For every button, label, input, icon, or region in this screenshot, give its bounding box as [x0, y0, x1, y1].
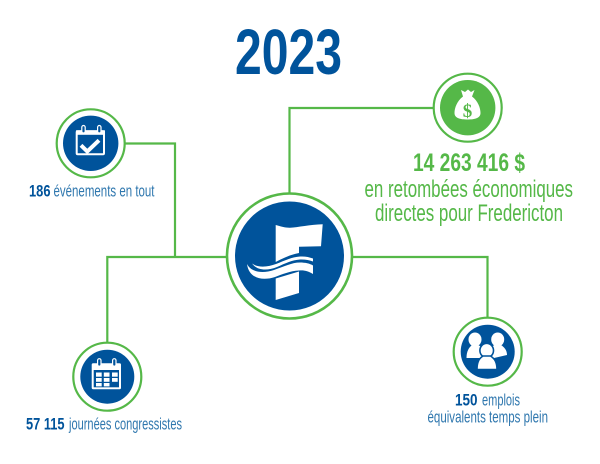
- stat: jobs: 150: [455, 391, 478, 410]
- flag logo: [247, 224, 323, 300]
- icon: monthly calendar: [73, 343, 141, 411]
- title: 2023: [235, 16, 342, 88]
- stat: events: 186: [29, 182, 50, 200]
- stat: delegate days: 57 115: [26, 414, 64, 434]
- stat: jobs: équivalents temps plein: [428, 408, 548, 427]
- stat: jobs: emplois: [482, 391, 520, 410]
- icon: calendar with check: [57, 109, 125, 177]
- stat: delegate days: journées congressistes: [68, 414, 182, 434]
- icon: money bag: $: [463, 101, 472, 122]
- stat: events: [29, 182, 155, 200]
- connector lines: [107, 108, 488, 342]
- stat: events: événements en tout: [54, 182, 155, 200]
- stat: delegate days: [26, 414, 182, 434]
- stat: economic impact: [364, 149, 573, 227]
- icon: people: [454, 318, 522, 386]
- icon: money bag: [434, 74, 502, 142]
- stat: jobs: [428, 391, 548, 427]
- central logo: [227, 194, 352, 318]
- stat: economic impact: 14 263 416 $: [413, 149, 525, 177]
